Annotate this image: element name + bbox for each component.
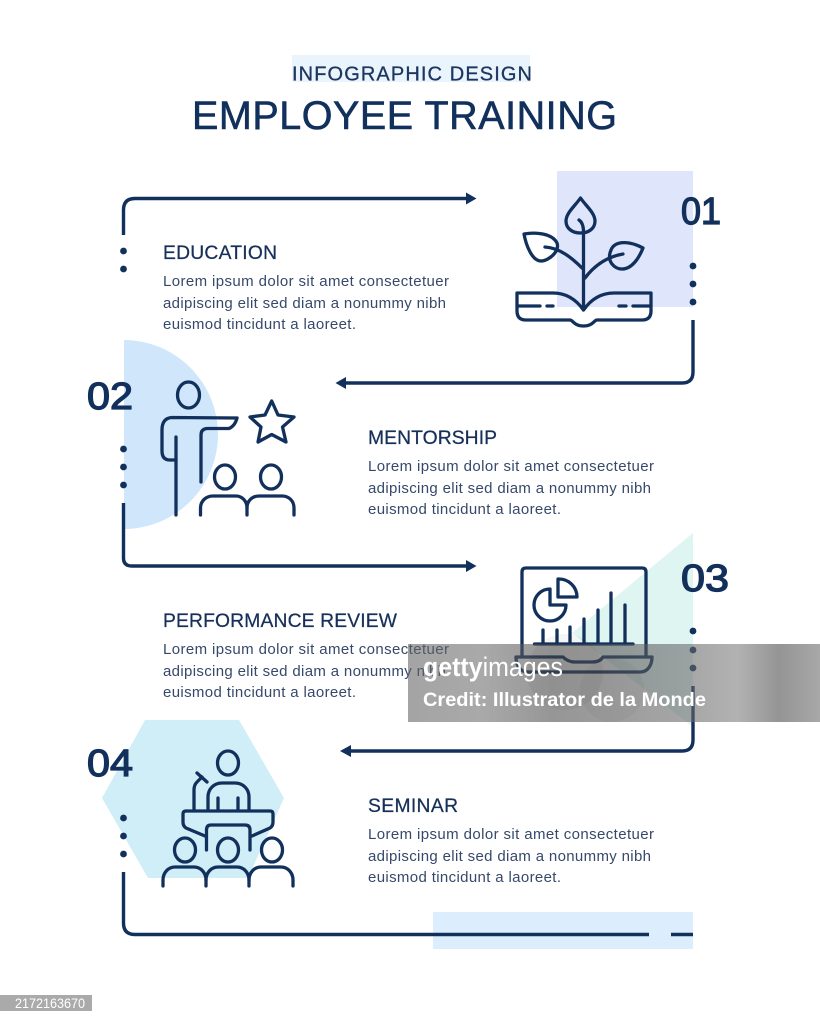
triangle backdrop [572,533,693,727]
body text: adipiscing elit sed diam a nonummy nibh [163,295,446,312]
number 01: 01 [681,191,721,233]
connector: closing line from step 4 [120,815,693,934]
heading: PERFORMANCE REVIEW [163,611,398,632]
body text: adipiscing elit sed diam a nonummy nibh [368,480,651,497]
body text [368,458,654,518]
footer highlight bar [433,912,693,949]
subtitle: INFOGRAPHIC DESIGN [292,64,532,86]
step 2: mentorship [87,340,654,529]
title: EMPLOYEE TRAINING [192,94,617,138]
number 03: 03 [681,558,729,600]
connector: arrow from step 3 to step 4 [340,628,696,757]
body text: Lorem ipsum dolor sit amet consectetuer [163,641,449,658]
body text: euismod tincidunt a laoreet. [163,316,356,333]
body text: Lorem ipsum dolor sit amet consectetuer [368,458,654,475]
image id tag: 2172163670 [15,995,85,1011]
body text: adipiscing elit sed diam a nonummy nibh [368,848,651,865]
subtitle highlight [292,55,530,82]
connector: arrow from step 2 to step 3 [120,446,476,572]
square backdrop [557,171,693,307]
icon: laptop with charts [516,568,652,672]
body text [368,826,654,886]
watermark credit: Credit: Illustrator de la Monde [423,689,706,711]
number 04: 04 [87,743,133,785]
semicircle backdrop [124,340,218,529]
watermark banner [408,634,820,722]
step 1: education [163,171,721,333]
body text: Lorem ipsum dolor sit amet consectetuer [163,273,449,290]
body text: adipiscing elit sed diam a nonummy nibh [163,663,446,680]
watermark logo: gettyimages [423,652,563,682]
heading: EDUCATION [163,243,277,264]
body text: euismod tincidunt a laoreet. [163,684,356,701]
icon: plant growing from book [517,198,651,326]
heading: MENTORSHIP [368,428,497,449]
hexagon backdrop [102,720,284,878]
number 02: 02 [87,376,133,418]
connector: top arrow from step 1 text [120,192,476,272]
body text: euismod tincidunt a laoreet. [368,501,561,518]
step 4: seminar [87,720,654,886]
heading: SEMINAR [368,796,458,817]
step 3: performance review [163,533,729,727]
body text [163,273,449,333]
body text: euismod tincidunt a laoreet. [368,869,561,886]
body text: Lorem ipsum dolor sit amet consectetuer [368,826,654,843]
icon: speaker at podium with audience [163,751,293,886]
header [192,55,617,138]
icon: mentor with audience and star [162,382,294,515]
body text [163,641,449,701]
connector: arrow from step 1 to step 2 [336,263,696,389]
